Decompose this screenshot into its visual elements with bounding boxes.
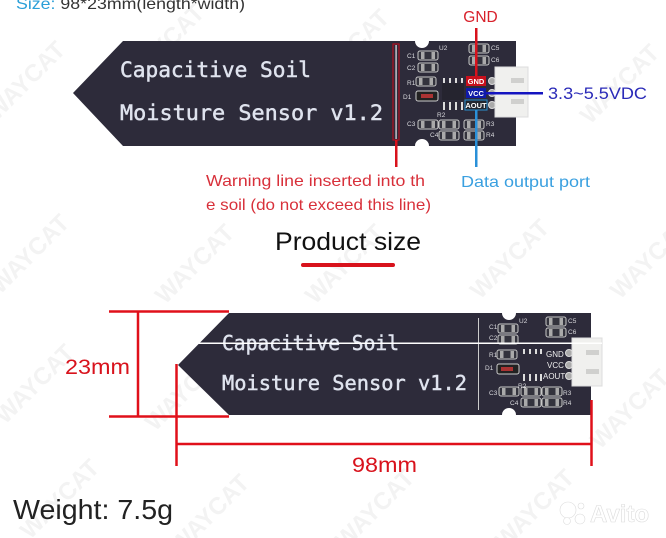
bottom sensor board xyxy=(178,313,602,415)
top sensor board xyxy=(73,41,528,167)
connector xyxy=(495,67,528,117)
height dimension: 23mm xyxy=(65,356,130,379)
board components: U2 xyxy=(519,318,528,325)
length dimension: 98mm xyxy=(352,454,417,477)
board components: R1 xyxy=(489,352,498,359)
pin labels: VCC xyxy=(468,89,484,98)
data output callout xyxy=(461,110,591,191)
avito logo: Avito xyxy=(590,501,649,528)
board components: R2 xyxy=(437,112,446,119)
GND callout xyxy=(463,9,498,76)
board label text xyxy=(120,58,383,125)
voltage callout: 3.3~5.5VDC xyxy=(548,85,647,103)
board components xyxy=(478,317,577,410)
product size heading: Product size xyxy=(275,228,421,256)
board components: R3 xyxy=(486,121,495,128)
board components: C1 xyxy=(407,53,416,60)
board components: R1 xyxy=(407,80,416,87)
board components: C2 xyxy=(489,335,498,342)
board components: C6 xyxy=(491,57,500,64)
connector xyxy=(572,338,602,386)
watermarks: WAYCAT xyxy=(465,214,555,304)
board components xyxy=(403,44,500,140)
board label text xyxy=(222,331,467,395)
board components: D1 xyxy=(403,94,412,101)
board components: R3 xyxy=(563,390,572,397)
white guide line xyxy=(70,342,602,344)
board label text: Capacitive Soil xyxy=(222,331,399,355)
board components: C1 xyxy=(489,324,498,331)
pin labels: GND xyxy=(468,77,485,86)
board components: C5 xyxy=(568,318,577,325)
board components: R2 xyxy=(518,383,527,390)
watermarks: WAYCAT xyxy=(120,0,210,89)
board components: VCC xyxy=(547,361,564,370)
length dimension xyxy=(176,364,592,477)
board label text: Moisture Sensor v1.2 xyxy=(222,371,467,395)
board components: R4 xyxy=(486,132,495,139)
warning text: Warning line inserted into th xyxy=(206,173,425,190)
board components: U2 xyxy=(439,45,448,52)
board components: C4 xyxy=(510,400,519,407)
board components: C4 xyxy=(430,132,439,139)
GND callout: GND xyxy=(463,9,498,26)
product size heading xyxy=(275,228,421,267)
data output callout: Data output port xyxy=(461,174,591,191)
warning text xyxy=(206,173,431,214)
warning line marker xyxy=(393,44,399,167)
warning text: e soil (do not exceed this line) xyxy=(206,197,431,214)
board components: C3 xyxy=(407,121,416,128)
height dimension xyxy=(65,311,229,416)
board label text: Moisture Sensor v1.2 xyxy=(120,101,383,125)
board components: AOUT xyxy=(543,372,565,381)
board components: C3 xyxy=(489,390,498,397)
board components: R4 xyxy=(563,400,572,407)
watermarks: WAYCAT xyxy=(150,219,240,309)
pin pads xyxy=(488,78,496,108)
watermarks: WAYCAT xyxy=(575,39,665,129)
board label text: Capacitive Soil xyxy=(120,58,311,82)
watermarks: WAYCAT xyxy=(305,4,395,94)
board components: GND xyxy=(546,350,564,359)
board components: C6 xyxy=(568,329,577,336)
pin labels xyxy=(465,76,487,110)
watermarks: WAYCAT xyxy=(300,219,390,309)
board components: C5 xyxy=(491,45,500,52)
board components: D1 xyxy=(485,365,494,372)
avito logo xyxy=(560,501,649,528)
weight: Weight: 7.5g xyxy=(13,494,173,525)
pin labels: AOUT xyxy=(465,101,487,110)
board components: C2 xyxy=(407,65,416,72)
watermarks: WAYCAT xyxy=(140,346,230,436)
